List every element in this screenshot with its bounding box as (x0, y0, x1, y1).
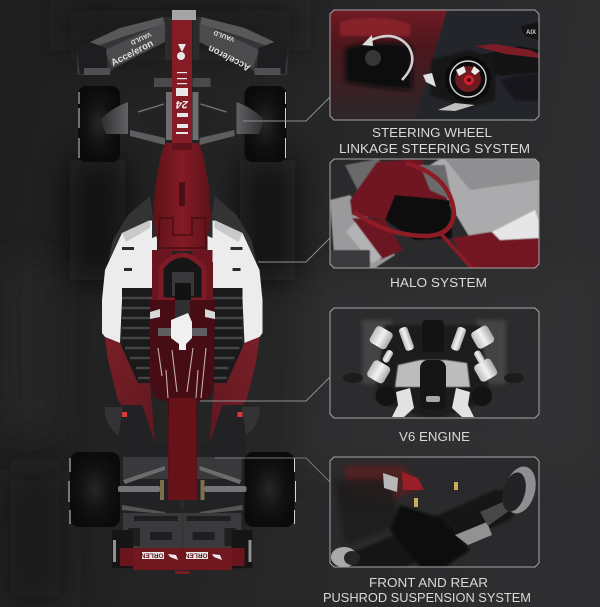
heading: steering wheel: LINKAGE STEERING SYSTEM (339, 141, 530, 156)
engine block (375, 325, 490, 418)
central red nose strip (172, 20, 192, 143)
panel: steering wheel (330, 10, 540, 120)
front wing sponsor texts (109, 29, 252, 73)
race car top view (69, 10, 296, 574)
car fragment (482, 46, 538, 76)
nose sponsor marks (176, 44, 188, 134)
heading: halo: HALO SYSTEM (390, 275, 487, 290)
rear wing: ORLEN (184, 552, 208, 558)
panel: suspension (330, 457, 541, 567)
front tyre (445, 56, 491, 102)
front wing sponsor texts: Acce/eron (109, 38, 155, 69)
rear wing (133, 548, 232, 574)
nose tip (172, 10, 196, 20)
panel: steering wheel: AIX (526, 30, 536, 36)
leader line: suspension (215, 458, 330, 482)
white rotation arrow (369, 36, 412, 80)
cockpit and halo (152, 255, 213, 300)
lower white crescents (392, 388, 414, 417)
heading: steering wheel: STEERING WHEEL (372, 125, 492, 140)
leader line: steering (243, 97, 330, 121)
heading: suspension: PUSHROD SUSPENSION SYSTEM (323, 590, 531, 605)
leader line: engine (200, 377, 330, 401)
steering assembly (345, 42, 412, 90)
heading: suspension (323, 575, 531, 605)
wing tip (423, 73, 436, 87)
number 24: 24 (176, 98, 189, 110)
engine cover (150, 300, 215, 508)
heading: V6 engine: V6 ENGINE (399, 429, 470, 444)
front wing sponsor texts: VAULD (129, 30, 152, 46)
cylinders (366, 324, 499, 385)
brake discs (508, 466, 536, 514)
halo ring (354, 163, 454, 236)
chassis arms (345, 490, 525, 567)
main red body and nose (153, 143, 211, 251)
rear wing: ORLEN (140, 552, 164, 558)
panel: halo (330, 159, 540, 269)
front wing sponsor texts: Acce/eron (206, 42, 252, 73)
heading: steering wheel (339, 125, 530, 156)
heading: suspension: FRONT AND REAR (369, 575, 488, 590)
leader line: halo (258, 238, 330, 262)
panel: V6 engine (330, 308, 540, 418)
front wing sponsor texts: VAULD (212, 29, 236, 43)
